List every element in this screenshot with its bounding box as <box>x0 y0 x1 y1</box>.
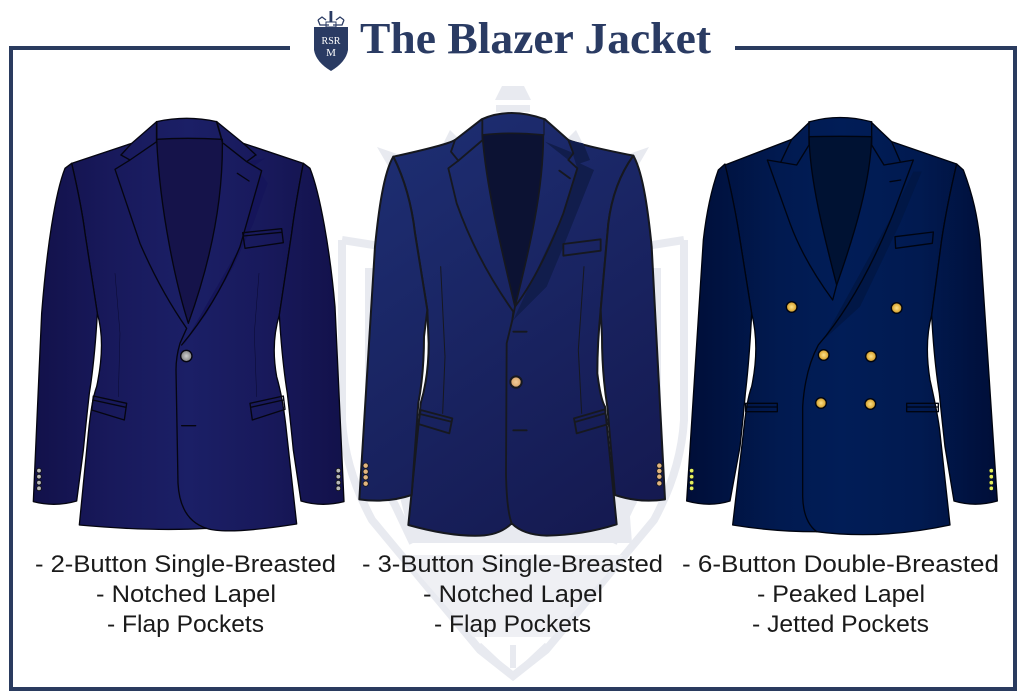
jacket 1 lapels and seams <box>92 122 285 528</box>
title: The Blazer Jacket <box>360 14 711 63</box>
watermark: shield crest <box>342 86 684 677</box>
jacket 2 shirt opening <box>482 133 543 307</box>
jacket 3: midnight 6-button double-breasted <box>687 117 997 535</box>
jacket 1 lapel shadow <box>183 158 268 345</box>
caption: jacket 1 features: - 2-Button Single-Breasted <box>35 551 336 578</box>
caption: jacket 1 features: - Notched Lapel <box>96 581 276 608</box>
jacket 2 sleeve buttons <box>363 463 662 486</box>
jacket 3 lapel shadow <box>823 172 922 340</box>
caption: jacket 2 features: - Notched Lapel <box>423 581 603 608</box>
caption: jacket 3 features: - Jetted Pockets <box>752 611 929 638</box>
jacket 1 body <box>72 118 303 531</box>
jacket 3 gold front buttons <box>786 302 902 409</box>
jacket 3 body <box>725 117 957 535</box>
caption: jacket 3 features <box>682 551 999 638</box>
jacket 1: navy 2-button single-breasted <box>33 118 344 531</box>
caption: jacket 3 features: - 6-Button Double-Breasted <box>682 551 999 578</box>
jacket 1 front button <box>181 350 192 362</box>
jacket 2 front button <box>510 376 522 388</box>
jacket 1 sleeve buttons <box>37 468 341 491</box>
icon: RSM crest logo: M <box>326 47 336 59</box>
jacket 1 right sleeve <box>279 163 344 504</box>
jacket 2 lapel shadow <box>513 140 594 320</box>
jacket 2 right sleeve <box>601 156 665 501</box>
jacket 2 lapels and seams <box>418 119 607 523</box>
caption: jacket 2 features: - Flap Pockets <box>434 611 591 638</box>
jacket 3 sleeve buttons <box>689 468 993 490</box>
jacket 2 body <box>393 113 633 536</box>
icon: RSM crest logo <box>314 11 348 71</box>
caption: jacket 3 features: - Peaked Lapel <box>757 581 925 608</box>
jacket 3 shirt opening <box>809 136 872 285</box>
caption: jacket 2 features <box>362 551 663 638</box>
jacket 3 right sleeve <box>932 164 997 504</box>
jacket 3 left sleeve <box>687 164 752 504</box>
jacket 1 left sleeve <box>33 163 97 504</box>
caption: jacket 2 features: - 3-Button Single-Breasted <box>362 551 663 578</box>
jacket 2: blue 3-button single-breasted <box>359 113 665 536</box>
jacket 3 lapels and seams <box>746 122 938 532</box>
jacket 2 upper lapel shadow <box>545 142 573 160</box>
jacket 2 left sleeve <box>359 157 427 501</box>
icon: RSM crest logo: RSR <box>322 36 341 47</box>
caption: jacket 1 features <box>35 551 336 638</box>
jacket 1 shirt opening <box>157 138 222 323</box>
caption: jacket 1 features: - Flap Pockets <box>107 611 264 638</box>
